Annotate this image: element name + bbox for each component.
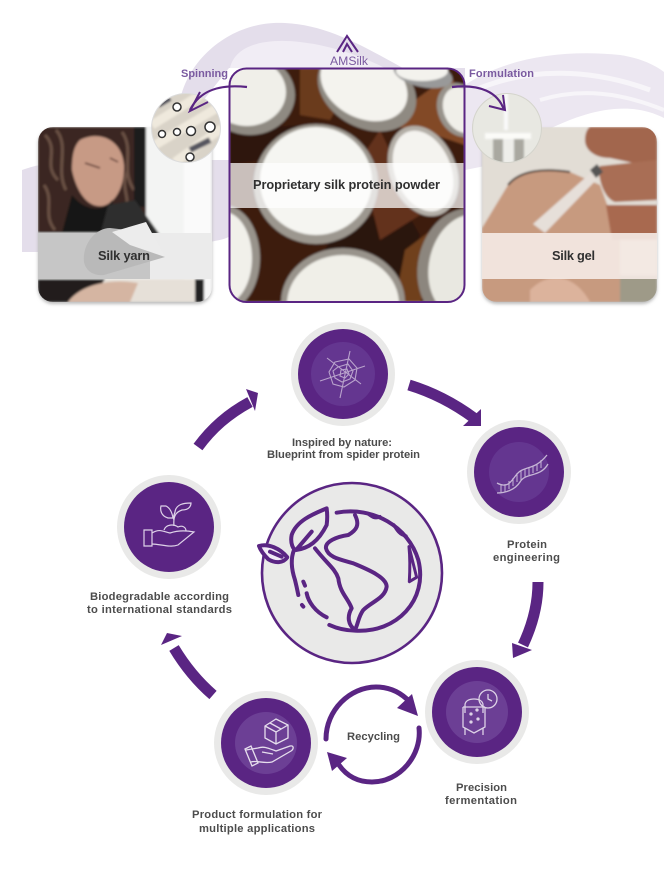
node: protein engineering — [467, 420, 571, 524]
label: protein engineering: Protein — [507, 539, 547, 551]
label: formulation: Formulation — [469, 68, 534, 80]
panel: proprietary silk protein powder — [228, 68, 466, 303]
icon: spider web — [320, 351, 365, 398]
label: precision fermentation: Precision — [456, 782, 507, 794]
panel: silk gel — [482, 127, 657, 304]
arrow: formulation — [452, 86, 505, 110]
label: spinning: Spinning — [181, 68, 228, 80]
icon: DNA helix — [497, 455, 548, 493]
label: biodegradable — [87, 591, 232, 616]
label: precision fermentation: fermentation — [445, 795, 517, 807]
label: product formulation: multiple applications — [199, 823, 315, 835]
label: protein engineering: engineering — [493, 552, 560, 564]
caption: proprietary silk protein powder: Proprietary silk protein powder — [253, 177, 440, 192]
label: biodegradable: to international standards — [87, 604, 232, 616]
image circle: formulation vessel — [472, 92, 542, 164]
logo: AMSilk: AMSilk — [330, 56, 368, 68]
caption: silk yarn: Silk yarn — [98, 248, 150, 263]
centre: globe with leaf — [259, 483, 442, 663]
label: recycling: Recycling — [347, 731, 400, 743]
arrow: spinning — [190, 86, 247, 111]
caption: silk gel: Silk gel — [552, 248, 595, 263]
arrow: engineering to fermentation — [512, 582, 538, 658]
label: inspired by nature — [267, 437, 420, 461]
icon: hand holding sprout — [144, 503, 194, 546]
label: inspired by nature: Inspired by nature: — [292, 437, 392, 449]
label: protein engineering — [493, 539, 560, 564]
label: precision fermentation — [445, 782, 517, 807]
icon: hand holding box — [245, 719, 293, 766]
background lavender swooshes — [22, 23, 664, 252]
logo: AMSilk — [330, 36, 368, 68]
node: product formulation — [214, 691, 318, 795]
label: biodegradable: Biodegradable according — [90, 591, 229, 603]
panel: silk yarn — [38, 127, 212, 304]
arrow: formulation to biodegradable — [161, 633, 213, 695]
node: biodegradable — [117, 475, 221, 579]
arrow: nature to engineering — [409, 385, 481, 426]
label: product formulation — [192, 809, 323, 835]
node: precision fermentation — [425, 660, 529, 764]
recycling loop arrows — [326, 687, 419, 782]
icon: fermentation tank and clock — [463, 690, 497, 735]
arrow: biodegradable to nature — [198, 389, 258, 447]
label: product formulation: Product formulation for — [192, 809, 323, 821]
image circle: spinning bobbins — [150, 92, 222, 164]
node: inspired by nature — [291, 322, 395, 426]
label: inspired by nature: Blueprint from spider protein — [267, 449, 420, 461]
